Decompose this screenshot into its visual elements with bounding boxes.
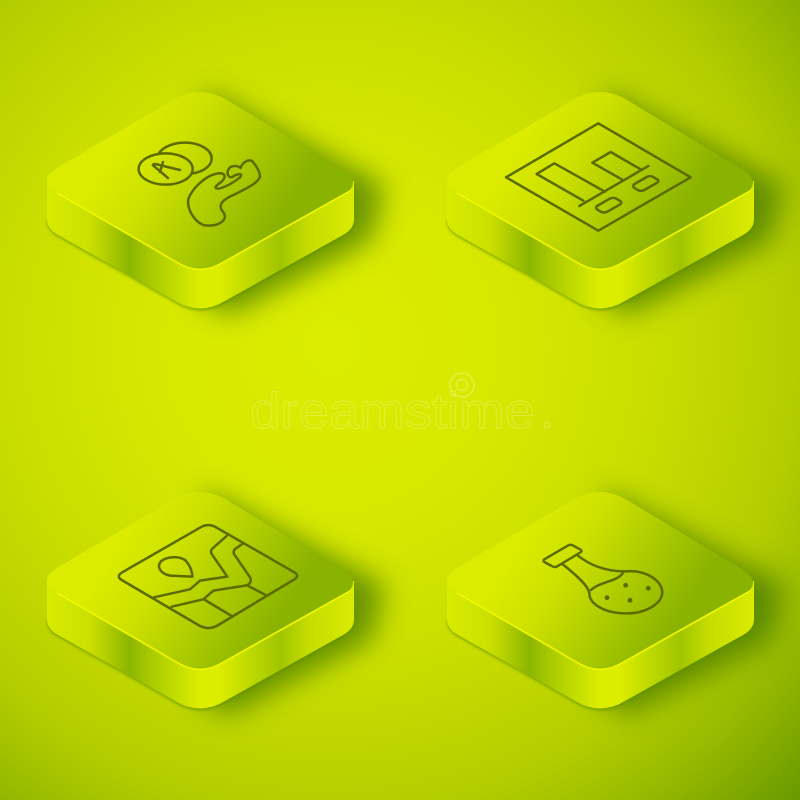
- icon: layout chart: [506, 123, 691, 231]
- icon: medal and hand: [139, 143, 260, 226]
- icon: map with pin: [119, 525, 297, 628]
- tile: map icon: [47, 490, 385, 715]
- watermark: dreamstime: [250, 383, 535, 439]
- tile: layout chart icon: [447, 90, 785, 315]
- icon: flask: [543, 545, 662, 613]
- tile: flask icon: [447, 490, 785, 715]
- tile: medal and hand icon: [47, 90, 385, 315]
